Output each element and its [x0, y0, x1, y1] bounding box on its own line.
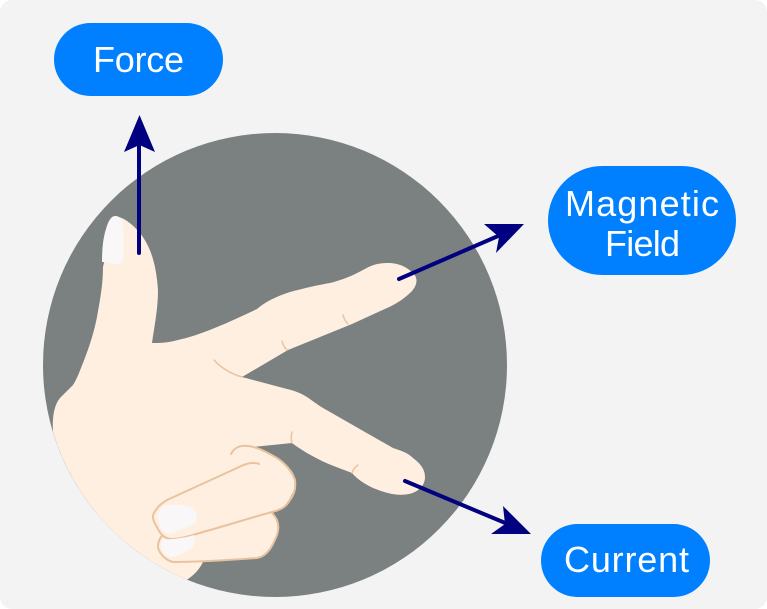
thumb nail [102, 216, 124, 264]
label: magnetic field [548, 166, 736, 275]
arrow: force [124, 115, 155, 253]
label: current [541, 524, 710, 597]
arrow: magnetic field [399, 224, 524, 279]
hand illustration [53, 216, 425, 580]
label: force [54, 23, 223, 96]
grey circle [43, 133, 507, 597]
middle fingernail [161, 535, 194, 557]
index fingernail [158, 505, 197, 534]
arrow: current [405, 481, 531, 534]
label: current: Current [564, 539, 689, 580]
knuckle creases [214, 315, 358, 473]
label: magnetic field: Magnetic [565, 183, 719, 224]
label: force: Force [93, 39, 184, 80]
label: magnetic field: Field [605, 223, 680, 264]
curled fingers outline [153, 446, 295, 562]
hand silhouette [53, 216, 425, 580]
